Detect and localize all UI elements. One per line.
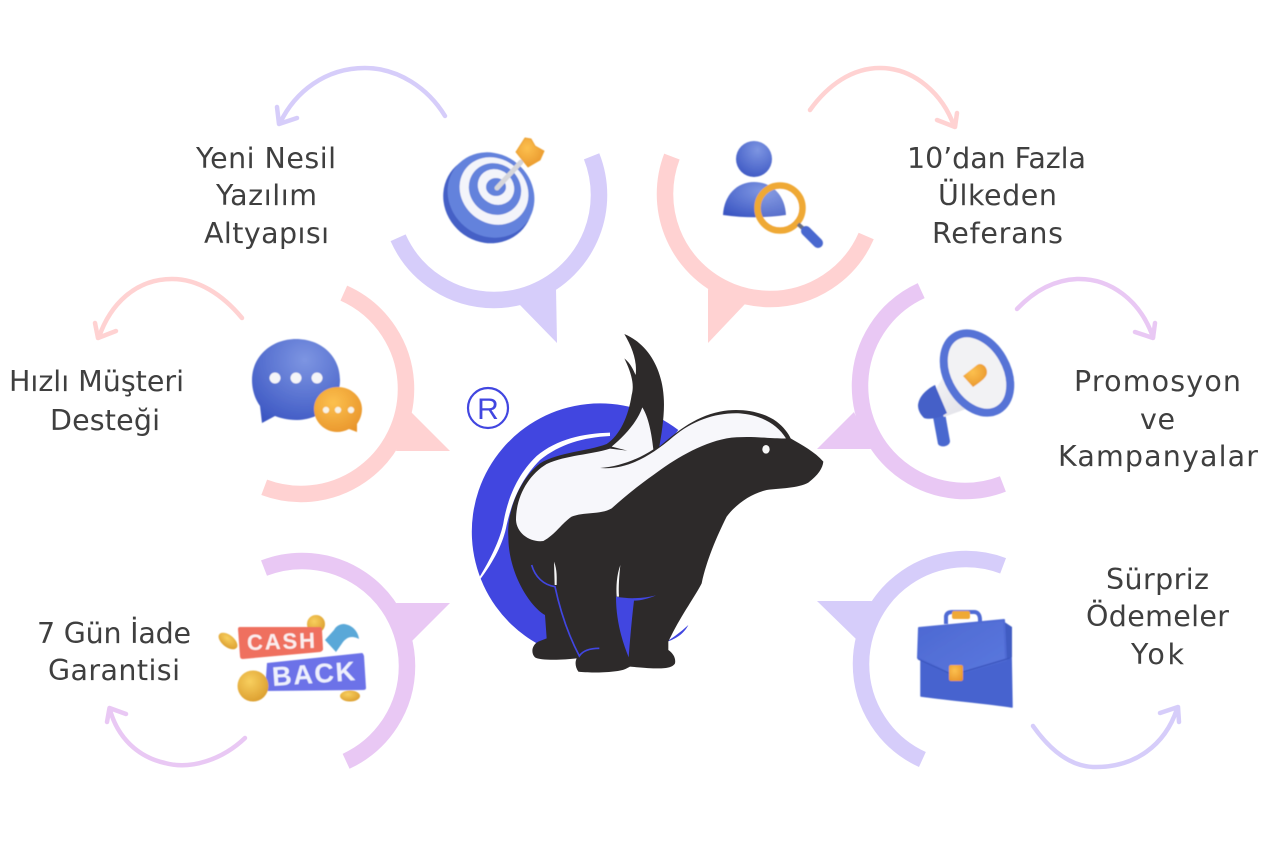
- ring: middle right: [817, 291, 1003, 491]
- logo: blue leg gap: [616, 595, 656, 657]
- icon: registered mark: R: [477, 393, 499, 426]
- label: Hızlı Müşteri Desteği: [9, 365, 184, 437]
- logo: white leg highlight: [554, 562, 620, 597]
- arrow: middle right: [1017, 279, 1155, 338]
- logo: honey badger: [472, 334, 823, 673]
- ring: top right: [665, 157, 866, 343]
- icon: target with arrow: [425, 135, 552, 262]
- label: 7 Gün İade Garantisi: Garantisi: [48, 654, 180, 687]
- label: Yeni Nesil Yazılım Altyapısı: [195, 142, 336, 250]
- logo: white mantle: [516, 407, 786, 541]
- label: Promosyon ve Kampanyalar: Kampanyalar: [1058, 440, 1258, 473]
- label: Yeni Nesil Yazılım Altyapısı: Altyapısı: [204, 217, 329, 250]
- label: Sürpriz Ödemeler Yok: [1086, 563, 1229, 671]
- label: 10'dan Fazla Ülkeden Referans: Referans: [932, 217, 1063, 250]
- label: 7 Gün İade Garantisi: 7 Gün İade: [37, 617, 191, 650]
- label: Sürpriz Ödemeler Yok: Sürpriz: [1106, 563, 1209, 596]
- label: Promosyon ve Kampanyalar: Promosyon: [1074, 365, 1241, 398]
- label: Hızlı Müşteri Desteği: Desteği: [50, 404, 160, 437]
- label: Promosyon ve Kampanyalar: [1058, 365, 1258, 473]
- arrow: top right: [810, 68, 957, 127]
- label: Sürpriz Ödemeler Yok: Yok: [1130, 638, 1184, 671]
- label: Hızlı Müşteri Desteği: Hızlı Müşteri: [9, 365, 184, 398]
- ring: bottom left: [264, 561, 450, 761]
- label: Promosyon ve Kampanyalar: ve: [1140, 403, 1175, 436]
- ring: middle left: [264, 293, 450, 494]
- arrow: top left: [277, 68, 445, 124]
- label: Yeni Nesil Yazılım Altyapısı: Yazılım: [215, 179, 317, 212]
- arrow: bottom right: [1033, 707, 1179, 767]
- label: 10'dan Fazla Ülkeden Referans: [907, 142, 1086, 250]
- icon: registered mark: [468, 388, 508, 428]
- label: 10'dan Fazla Ülkeden Referans: Ülkeden: [938, 178, 1057, 212]
- icon: briefcase: [918, 611, 1012, 707]
- ring: top left: [398, 156, 599, 343]
- label: Yeni Nesil Yazılım Altyapısı: Yeni Nesil: [195, 142, 336, 175]
- arrow: bottom left: [107, 708, 245, 765]
- label: 10'dan Fazla Ülkeden Referans: 10’dan Fazla: [907, 142, 1086, 175]
- label: Sürpriz Ödemeler Yok: Ödemeler: [1086, 599, 1229, 633]
- icon: cash back badge: CASH: [247, 628, 315, 655]
- arrow: middle left: [95, 279, 242, 338]
- icon: person with magnifier: [723, 141, 818, 243]
- logo: hind leg line: [532, 565, 599, 656]
- ring: bottom right: [817, 559, 1003, 760]
- icon: chat bubbles: [252, 339, 362, 432]
- label: 7 Gün İade Garantisi: [37, 617, 191, 687]
- logo: badger body: [508, 334, 823, 673]
- icon: megaphone: [918, 321, 1024, 446]
- icon: cash back badge: [216, 615, 366, 702]
- logo: blue circle backdrop: [472, 403, 688, 660]
- icon: cash back badge: BACK: [271, 656, 357, 692]
- logo: eye: [762, 445, 770, 454]
